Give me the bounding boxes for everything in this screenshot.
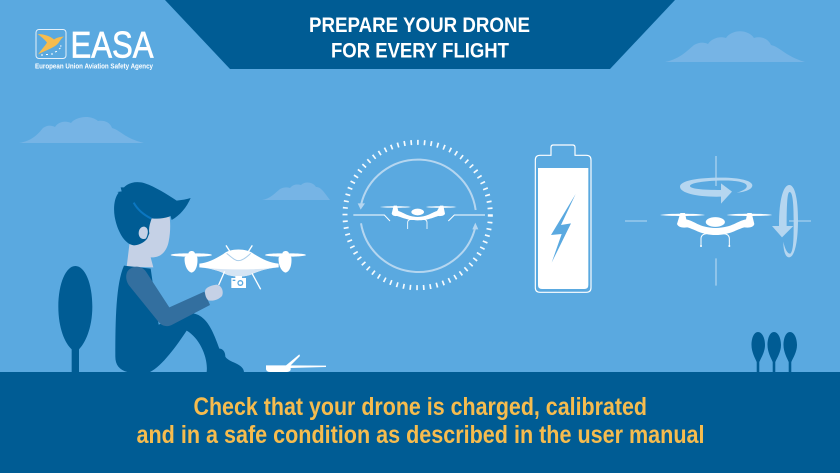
dial ticks xyxy=(345,142,490,288)
drone body xyxy=(199,249,279,276)
ground band xyxy=(0,372,840,473)
cloud: left xyxy=(19,117,144,143)
drone legs xyxy=(219,245,261,289)
drone camera xyxy=(231,276,246,288)
calibration icon (coordinates at 3x) xyxy=(345,142,490,288)
rotation arrow: bottom xyxy=(361,223,478,272)
drone: front view small xyxy=(380,206,457,229)
drone left rotor xyxy=(171,253,212,257)
logo icon: bird xyxy=(36,30,66,58)
drone: front view xyxy=(660,213,772,247)
header banner xyxy=(165,0,675,69)
title: PREPARE YOUR DRONE xyxy=(309,14,530,37)
person: torso and legs xyxy=(115,266,244,372)
person: ear xyxy=(139,227,148,239)
bottom message xyxy=(136,393,704,449)
crosshair lines xyxy=(625,156,811,286)
remote controller xyxy=(266,354,326,372)
person: arm xyxy=(126,267,210,326)
yaw arrow xyxy=(680,178,752,204)
logo wordmark: EASA xyxy=(70,24,154,66)
logo strapline: European Union Aviation Safety Agency xyxy=(35,62,154,70)
title xyxy=(309,14,530,62)
rotation arrow: top xyxy=(358,160,476,210)
right icons (coordinates at 3x) xyxy=(535,145,811,292)
cloud: middle xyxy=(262,183,330,200)
battery charge xyxy=(538,168,588,289)
cloud: top right xyxy=(665,31,805,62)
battery icon xyxy=(535,145,591,292)
attitude icon xyxy=(625,156,811,286)
left scene (coordinates at 3x) xyxy=(58,182,326,372)
person: hair highlight xyxy=(134,203,151,219)
drone: held by person xyxy=(171,245,306,289)
bottom message: and in a safe condition as described in the user manual xyxy=(136,421,704,449)
person: neck and face xyxy=(127,213,170,267)
person: hand xyxy=(205,285,223,301)
drone right rotor xyxy=(265,253,306,257)
person xyxy=(114,182,244,372)
roll arrow xyxy=(772,185,798,257)
person: hair xyxy=(114,182,191,245)
title: FOR EVERY FLIGHT xyxy=(331,40,509,62)
tree: left xyxy=(58,266,92,372)
EASA logo xyxy=(35,24,154,70)
horizon markers xyxy=(353,215,485,221)
bottom message: Check that your drone is charged, calibrated xyxy=(194,393,647,421)
lightning bolt xyxy=(551,194,576,263)
trees: right xyxy=(752,332,797,372)
